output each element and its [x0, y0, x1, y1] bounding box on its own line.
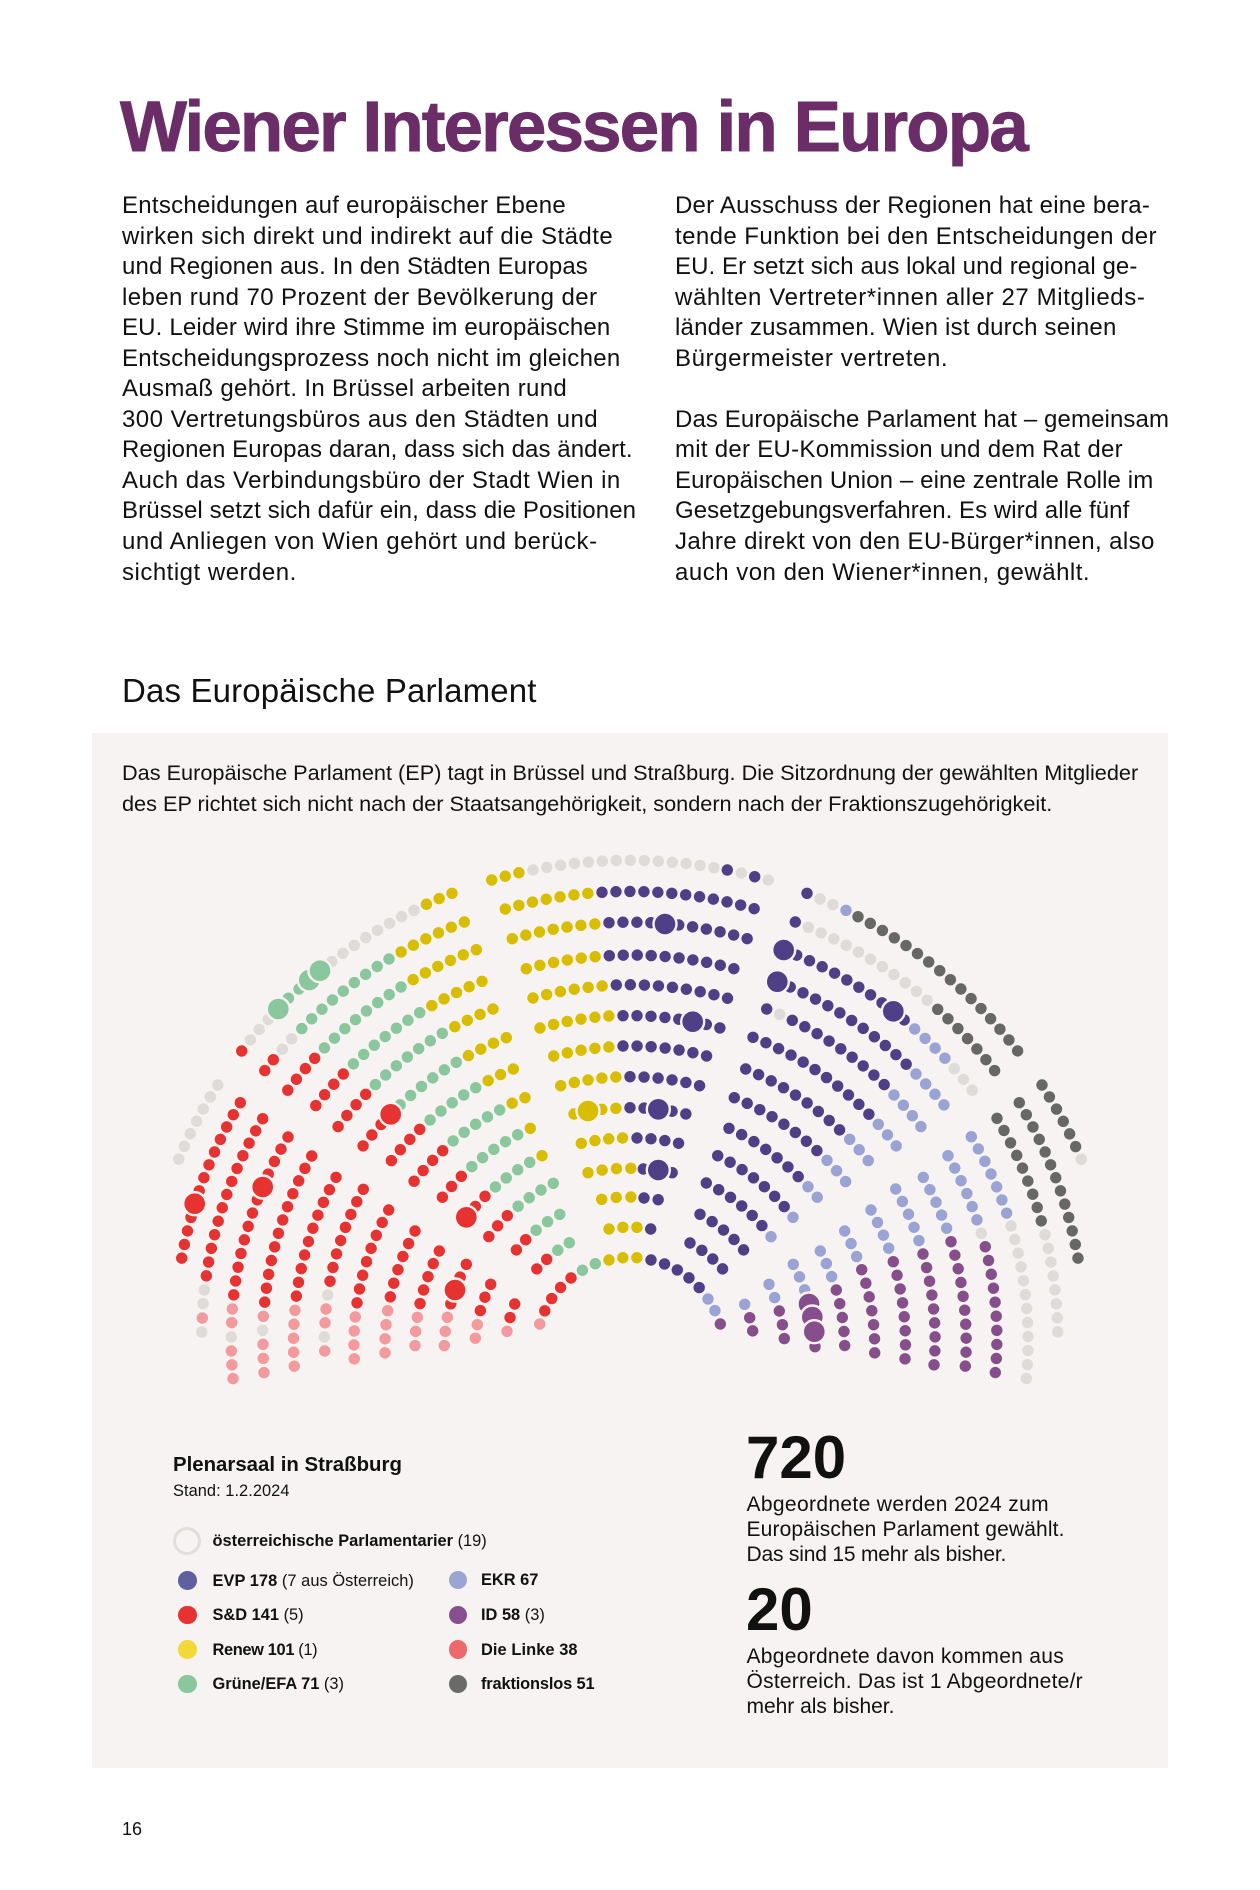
text block: left column — [122, 192, 636, 586]
stat text: 20: mehr als bisher. — [746, 1695, 894, 1718]
text block: right column — [675, 192, 1169, 586]
text block: left column: Entscheidungsprozess noch nicht im gleichen — [122, 345, 621, 372]
text block: left column: Ausmaß gehört. In Brüssel arbeiten rund — [122, 375, 567, 402]
text block: right column: Bürgermeister vertreten. — [675, 345, 948, 372]
stat text: 20: Abgeordnete davon kommen aus — [746, 1645, 1064, 1668]
legend dot: EKR — [449, 1571, 467, 1589]
text block: left column: Entscheidungen auf europäischer Ebene — [122, 192, 566, 219]
legend label: ID: ID 58 (3) — [481, 1606, 545, 1624]
seats: S&D — [182, 1045, 571, 1318]
text block: right column: Jahre direkt von den EU-Bürger*innen, also — [675, 528, 1155, 555]
seats: EKR — [708, 905, 1007, 1311]
legend label: S&D: S&D 141 (5) — [212, 1606, 304, 1624]
legend label: Grüne/EFA: Grüne/EFA 71 (3) — [212, 1675, 344, 1693]
text block: left column: Brüssel setzt sich dafür ein, dass die Positionen — [122, 497, 636, 524]
text block: right column: tende Funktion bei den Entscheidungen der — [675, 223, 1157, 250]
legend dot: EVP — [178, 1571, 197, 1590]
legend dot: S&D — [178, 1606, 197, 1624]
legend label: fraktionslos: fraktionslos 51 — [481, 1675, 594, 1693]
panel: parliament — [92, 733, 1168, 1768]
stat text: 20 — [746, 1645, 1083, 1718]
text block: left column: und Anliegen von Wien gehört und berück- — [122, 528, 598, 555]
legend label: EVP: EVP 178 (7 aus Österreich) — [212, 1572, 414, 1590]
stat text: 720 — [746, 1493, 1065, 1566]
text block: left column: leben rund 70 Prozent der Bevölkerung der — [122, 284, 597, 311]
text block: left column: 300 Vertretungsbüros aus den Städten und — [122, 406, 598, 433]
text block: right column: wählten Vertreter*innen aller 27 Mitglieds- — [675, 284, 1145, 311]
legend dot: Die Linke — [449, 1640, 467, 1659]
stat text: 20: Österreich. Das ist 1 Abgeordnete/r — [746, 1670, 1083, 1693]
legend label: Austrian members: österreichische Parlamentarier (19) — [212, 1532, 487, 1550]
text block: right column: auch von den Wiener*innen, gewählt. — [675, 559, 1090, 586]
legend dot: ID — [449, 1606, 467, 1624]
heading: Das Europäische Parlament: Das Europäische Parlament — [122, 672, 537, 709]
text block: right column: Europäischen Union – eine zentrale Rolle im — [675, 467, 1153, 494]
stat text: 720: Das sind 15 mehr als bisher. — [746, 1543, 1006, 1566]
legend heading: Plenarsaal in Straßburg — [173, 1454, 402, 1476]
legend date: Stand: 1.2.2024 — [173, 1482, 290, 1500]
text block: right column: mit der EU-Kommission und dem Rat der — [675, 436, 1123, 463]
legend dot: Renew — [178, 1640, 197, 1659]
seats: Grüne/EFA — [288, 959, 595, 1270]
text block: left column: und Regionen aus. In den Städten Europas — [122, 253, 588, 280]
legend dot: fraktionslos — [449, 1675, 467, 1693]
text block: right column: EU. Er setzt sich aus lokal und regional ge- — [675, 253, 1137, 280]
page number: 16 — [122, 1819, 142, 1839]
seats: Renew — [401, 873, 637, 1260]
text block: right column: Das Europäische Parlament hat – gemeinsam — [675, 406, 1169, 433]
legend label: Die Linke: Die Linke 38 — [481, 1641, 578, 1659]
intro text — [122, 760, 1138, 816]
seats: Die Linke — [197, 1309, 545, 1379]
seats: fraktionslos dark grey — [858, 917, 1078, 1258]
seats: ID — [715, 1242, 997, 1373]
text block: right column: länder zusammen. Wien ist durch seinen — [675, 314, 1117, 341]
legend label: EKR: EKR 67 — [481, 1571, 538, 1589]
Austrian members: large seats — [183, 912, 905, 1343]
text block: right column: Gesetzgebungsverfahren. Es wird alle fünf — [675, 497, 1129, 524]
title: Wiener Interessen in Europa — [120, 88, 1027, 167]
stat text: 720: Europäischen Parlament gewählt. — [746, 1518, 1065, 1541]
intro text: Das Europäische Parlament (EP) tagt in Brüssel und Straßburg. Die Sitzordnung der gewählten Mitglieder — [122, 760, 1138, 785]
legend label: Renew: Renew 101 (1) — [212, 1641, 317, 1659]
intro text: des EP richtet sich nicht nach der Staatsangehörigkeit, sondern nach der Fraktionszugehörigkeit. — [122, 791, 1052, 816]
stat number: 20: 20 — [746, 1576, 813, 1643]
seats: unassigned light grey — [179, 860, 1087, 1379]
stat number: 720: 720 — [746, 1424, 846, 1491]
text block: left column: wirken sich direkt und indirekt auf die Städte — [122, 223, 613, 250]
text block: left column: EU. Leider wird ihre Stimme im europäischen — [122, 314, 610, 341]
text block: left column: Regionen Europas daran, dass sich das ändert. — [122, 436, 633, 463]
legend dot: Grüne/EFA — [178, 1675, 197, 1693]
stat text: 720: Abgeordnete werden 2024 zum — [746, 1493, 1049, 1516]
text block: left column: Auch das Verbindungsbüro der Stadt Wien in — [122, 467, 621, 494]
text block: left column: sichtigt werden. — [122, 559, 297, 586]
text block: right column: Der Ausschuss der Regionen hat eine bera- — [675, 192, 1150, 219]
seats: EVP — [602, 864, 906, 1288]
legend: ring Austrian members — [173, 1527, 201, 1555]
